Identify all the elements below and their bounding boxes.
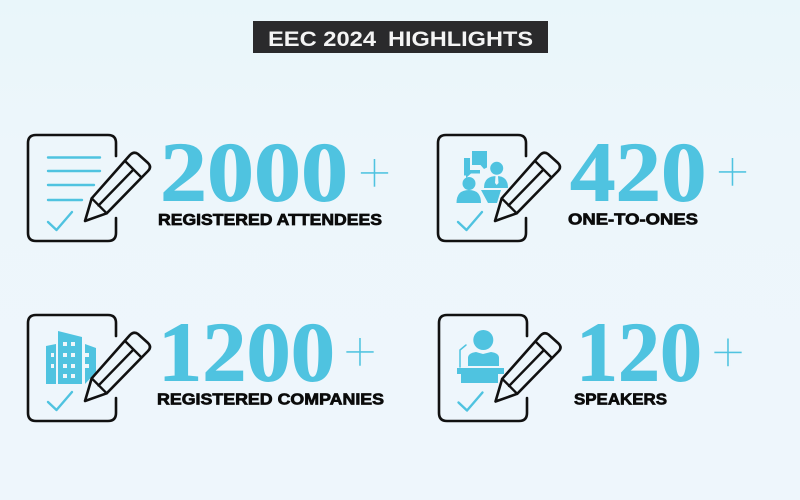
stat: 120+: + <box>711 319 745 387</box>
stat: 420+: 420 <box>570 126 706 220</box>
icon: speech bubbles <box>464 151 487 178</box>
panel: registered attendees <box>28 126 392 241</box>
title banner: EEC 2024 <box>268 28 376 51</box>
title banner <box>253 21 548 53</box>
label: speakers: SPEAKERS <box>574 392 667 408</box>
stat: 2000+: + <box>357 140 392 208</box>
stat: 2000+: 2000 <box>160 126 348 220</box>
icon: buildings with pencil <box>28 315 150 421</box>
label: one-to-ones: ONE-TO-ONES <box>568 212 698 228</box>
icon: office buildings <box>46 331 96 384</box>
stat: 1200+: + <box>343 318 377 386</box>
icon: people at table <box>456 162 508 203</box>
stat: 1200+: 1200 <box>158 306 335 400</box>
icon: meeting people with pencil <box>438 135 560 241</box>
icon: document with list and pencil <box>28 135 150 241</box>
icon: speaker at podium with pencil <box>439 315 560 421</box>
panel: speakers <box>439 306 745 421</box>
label: registered companies: REGISTERED COMPANIES <box>157 392 384 408</box>
label: registered attendees: REGISTERED ATTENDEES <box>158 212 382 229</box>
icon: speaker <box>457 330 504 383</box>
stat: 420+: + <box>715 138 750 206</box>
stat: 120+: 120 <box>576 306 702 400</box>
panel: one-to-ones <box>438 126 750 241</box>
title banner: HIGHLIGHTS <box>388 28 533 51</box>
panel: registered companies <box>28 306 384 421</box>
